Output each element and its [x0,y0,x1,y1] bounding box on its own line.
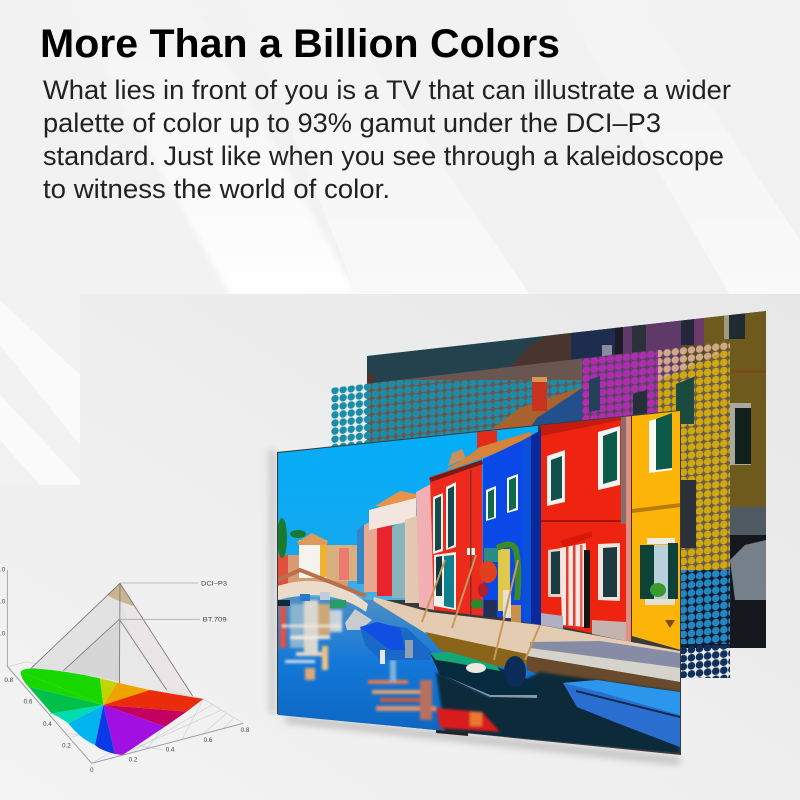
TV stand notch [436,730,468,736]
chart labels: BT.709 [203,617,227,624]
yellow building [632,408,681,650]
chart labels: DCI–P3 [201,580,228,587]
gamut pyramids [30,583,193,696]
TV with canal scene [277,408,681,760]
bridge [278,581,368,612]
chart labels: 0.4 [166,746,175,753]
chart labels: .0 [0,599,6,606]
chart axes [7,570,243,763]
chart labels: 0.6 [204,737,213,744]
gamut chart [0,567,250,774]
leader lines [119,583,200,619]
flowers and vines [471,544,521,623]
chart labels: 0.8 [4,677,14,684]
pale blue motorboat [563,680,680,747]
solid roof and chimney in dot layer [493,387,582,432]
red building [430,460,483,616]
sky [278,410,538,600]
reflections [280,600,500,732]
back image layer [367,300,768,650]
chart labels: 0.6 [24,698,33,705]
dark water [436,672,680,760]
chart labels: .0 [0,631,6,638]
description text: to witness the world of color. [43,174,390,204]
tree [277,518,306,558]
water [278,596,680,760]
chart labels [0,567,250,774]
blue boat [360,623,432,660]
TV shadow [268,450,680,764]
description text: What lies in front of you is a TV that can illustrate a wider [43,75,731,105]
title: More Than a Billion Colors [40,22,560,66]
chart labels: 0.4 [43,721,52,728]
walkway [373,597,680,668]
white covered boat [345,609,372,630]
blue building [483,430,541,625]
lower grey panel [0,294,800,800]
chart labels: 0.8 [241,727,250,734]
main red building [541,414,631,642]
chart labels: .0 [0,567,6,574]
chart labels: 0.2 [129,756,138,763]
distant buildings [288,555,348,587]
red chimney and roof [477,431,497,448]
grid floor [8,662,243,763]
chart labels: 0.2 [62,742,71,749]
description text: palette of color up to 93% gamut under the DCI–P3 [43,108,661,138]
chart labels: 0 [90,767,94,774]
colour horseshoe [21,668,203,755]
description text [43,75,731,204]
teal boat [430,653,537,698]
canal wall [425,632,527,667]
mooring poles [422,555,540,660]
halftone dot layer [331,340,730,680]
description text: standard. Just like when you see through a kaleidoscope [43,141,724,171]
